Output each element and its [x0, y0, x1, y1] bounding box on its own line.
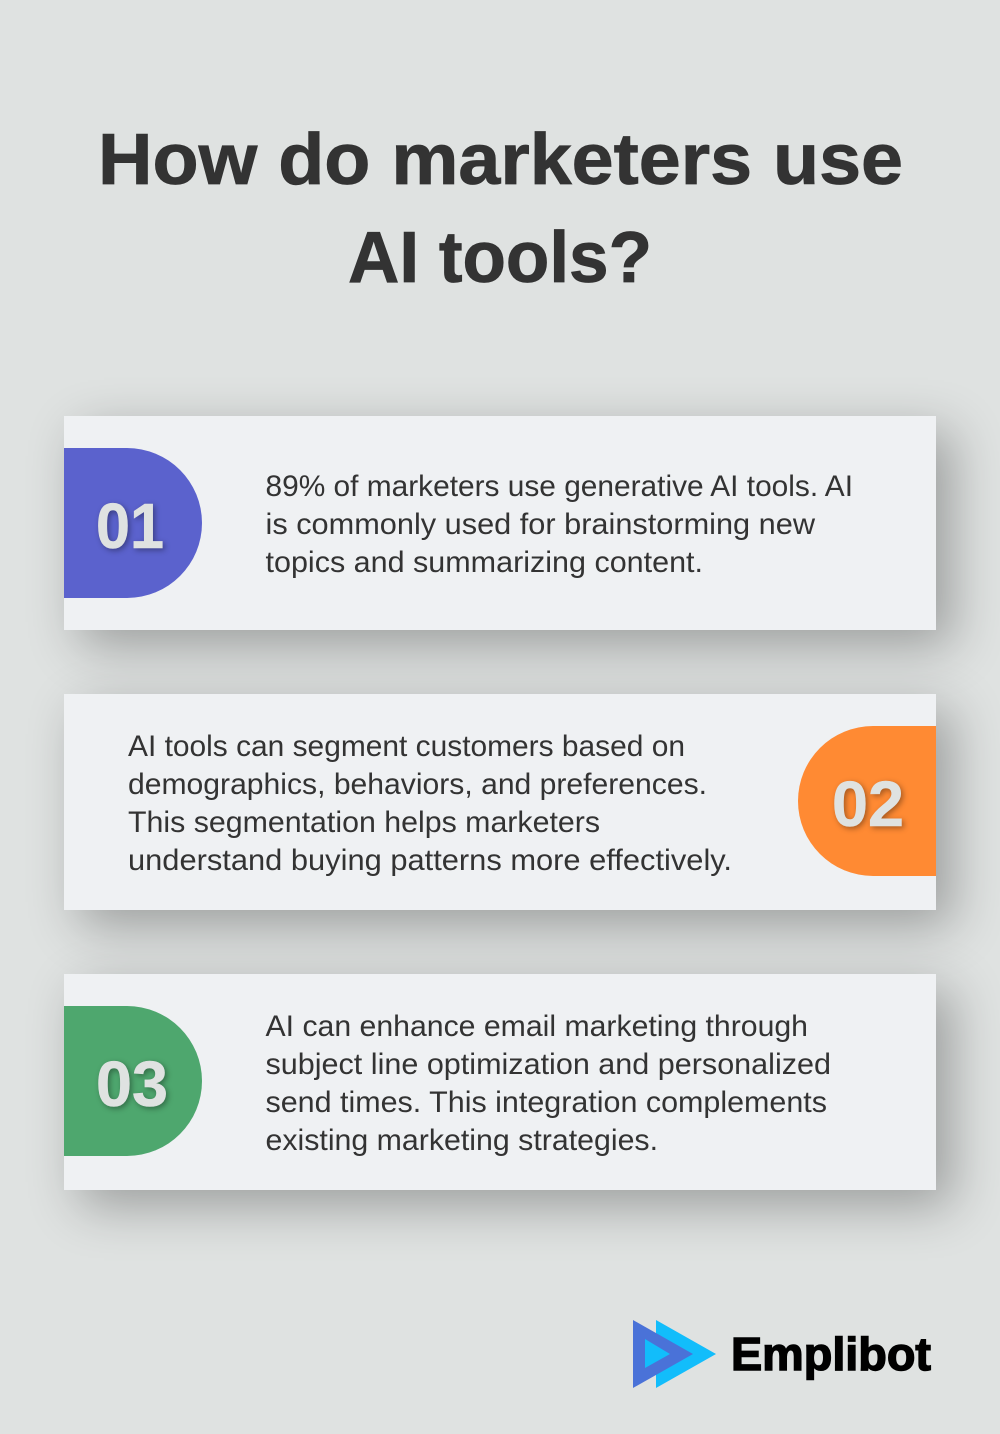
text: card 01 description: 89% of marketers use generative AI tools. AI	[266, 470, 853, 503]
panel: card 03	[64, 974, 936, 1190]
text: card 02 description	[128, 730, 732, 877]
text: card 01 description	[266, 470, 853, 579]
wordmark: Emplibot	[731, 1328, 931, 1380]
badge: 01: 01	[96, 490, 164, 562]
title: How do marketers use	[98, 120, 903, 200]
panel: card 02	[64, 694, 936, 910]
title: AI tools?	[348, 218, 652, 298]
badge: 02: 02	[832, 768, 904, 840]
text: card 02 description: AI tools can segment customers based on	[128, 730, 685, 763]
logo: Emplibot	[633, 1320, 932, 1388]
text: card 02 description: This segmentation helps marketers	[128, 806, 600, 839]
text: card 01 description: is commonly used for brainstorming new	[266, 508, 816, 541]
text: card 02 description: understand buying patterns more effectively.	[128, 844, 732, 877]
badge: 03: 03	[96, 1048, 168, 1120]
text: card 03 description: AI can enhance email marketing through	[266, 1010, 808, 1043]
title	[98, 120, 903, 298]
panel: card 01	[64, 416, 936, 630]
icon: play triangles	[633, 1320, 716, 1388]
text: card 01 description: topics and summarizing content.	[266, 546, 703, 579]
text: card 03 description: subject line optimization and personalized	[266, 1048, 831, 1081]
badge: 02	[798, 726, 936, 876]
text: card 03 description: send times. This integration complements	[266, 1086, 827, 1119]
badge: 01	[64, 448, 202, 598]
badge: 03	[64, 1006, 202, 1156]
text: card 03 description	[266, 1010, 831, 1157]
text: card 03 description: existing marketing strategies.	[266, 1124, 658, 1157]
text: card 02 description: demographics, behaviors, and preferences.	[128, 768, 707, 801]
